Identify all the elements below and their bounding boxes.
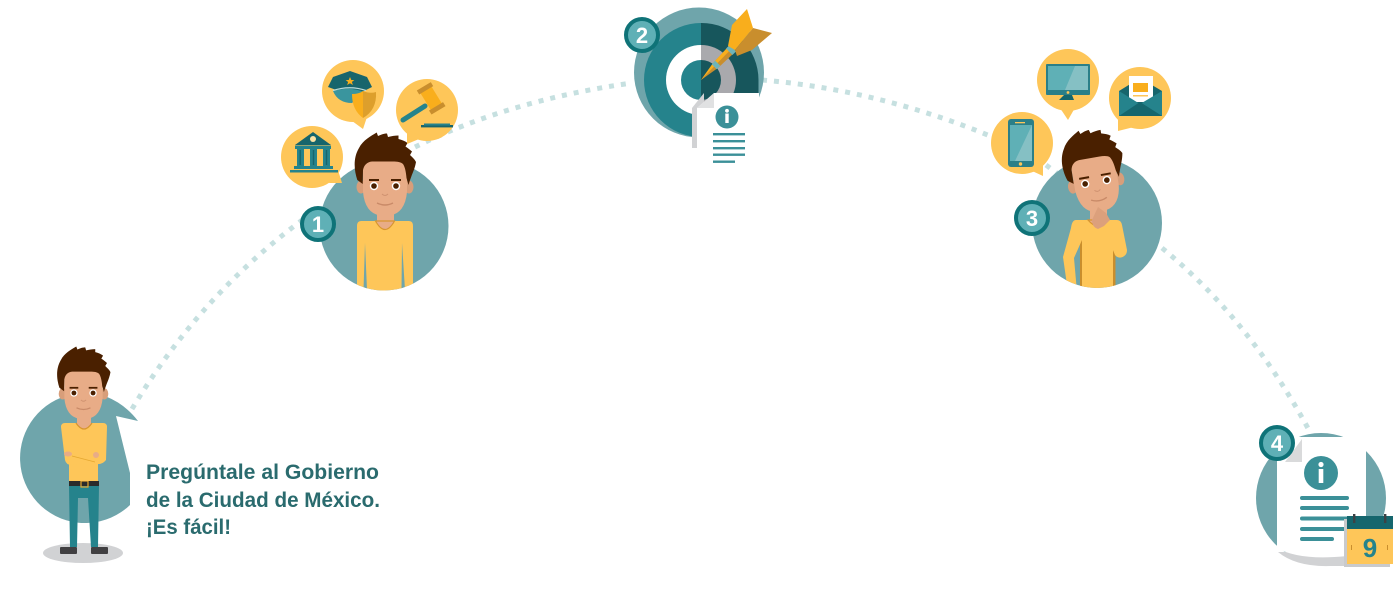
step 1: person with institutions bbox=[320, 132, 448, 295]
dotted path bbox=[132, 80, 1310, 432]
step 0: standing person with speech bubble bbox=[20, 346, 138, 563]
icon: envelope bubble bbox=[1109, 67, 1171, 131]
step 4: document and calendar bbox=[1256, 433, 1393, 567]
icon: gavel bubble bbox=[396, 79, 458, 144]
badge 4 bbox=[1261, 427, 1293, 459]
icon: monitor bubble bbox=[1037, 49, 1099, 120]
text: call to action: ¡Es fácil! bbox=[146, 516, 231, 539]
step 2: target with dart and document bbox=[634, 8, 772, 170]
badge 2: 2 bbox=[636, 23, 648, 48]
icon: police cap and shield bubble bbox=[322, 60, 384, 129]
badge 2 bbox=[626, 19, 658, 51]
icon: smartphone bubble bbox=[991, 112, 1053, 176]
badge 3: 3 bbox=[1026, 206, 1038, 231]
icon: calendar: 9 bbox=[1363, 533, 1377, 563]
right margin bbox=[1393, 0, 1400, 590]
badge 3 bbox=[1016, 202, 1048, 234]
badge 4: 4 bbox=[1271, 431, 1284, 456]
step 3: thinking person with devices bbox=[1032, 124, 1162, 295]
badge 1: 1 bbox=[312, 212, 324, 237]
text: call to action bbox=[146, 461, 380, 539]
badge 1 bbox=[302, 208, 334, 240]
icon: bank bubble bbox=[281, 126, 343, 188]
text: call to action: de la Ciudad de México. bbox=[146, 489, 380, 512]
text: call to action: Pregúntale al Gobierno bbox=[146, 461, 379, 484]
icon: dart bbox=[701, 9, 772, 80]
